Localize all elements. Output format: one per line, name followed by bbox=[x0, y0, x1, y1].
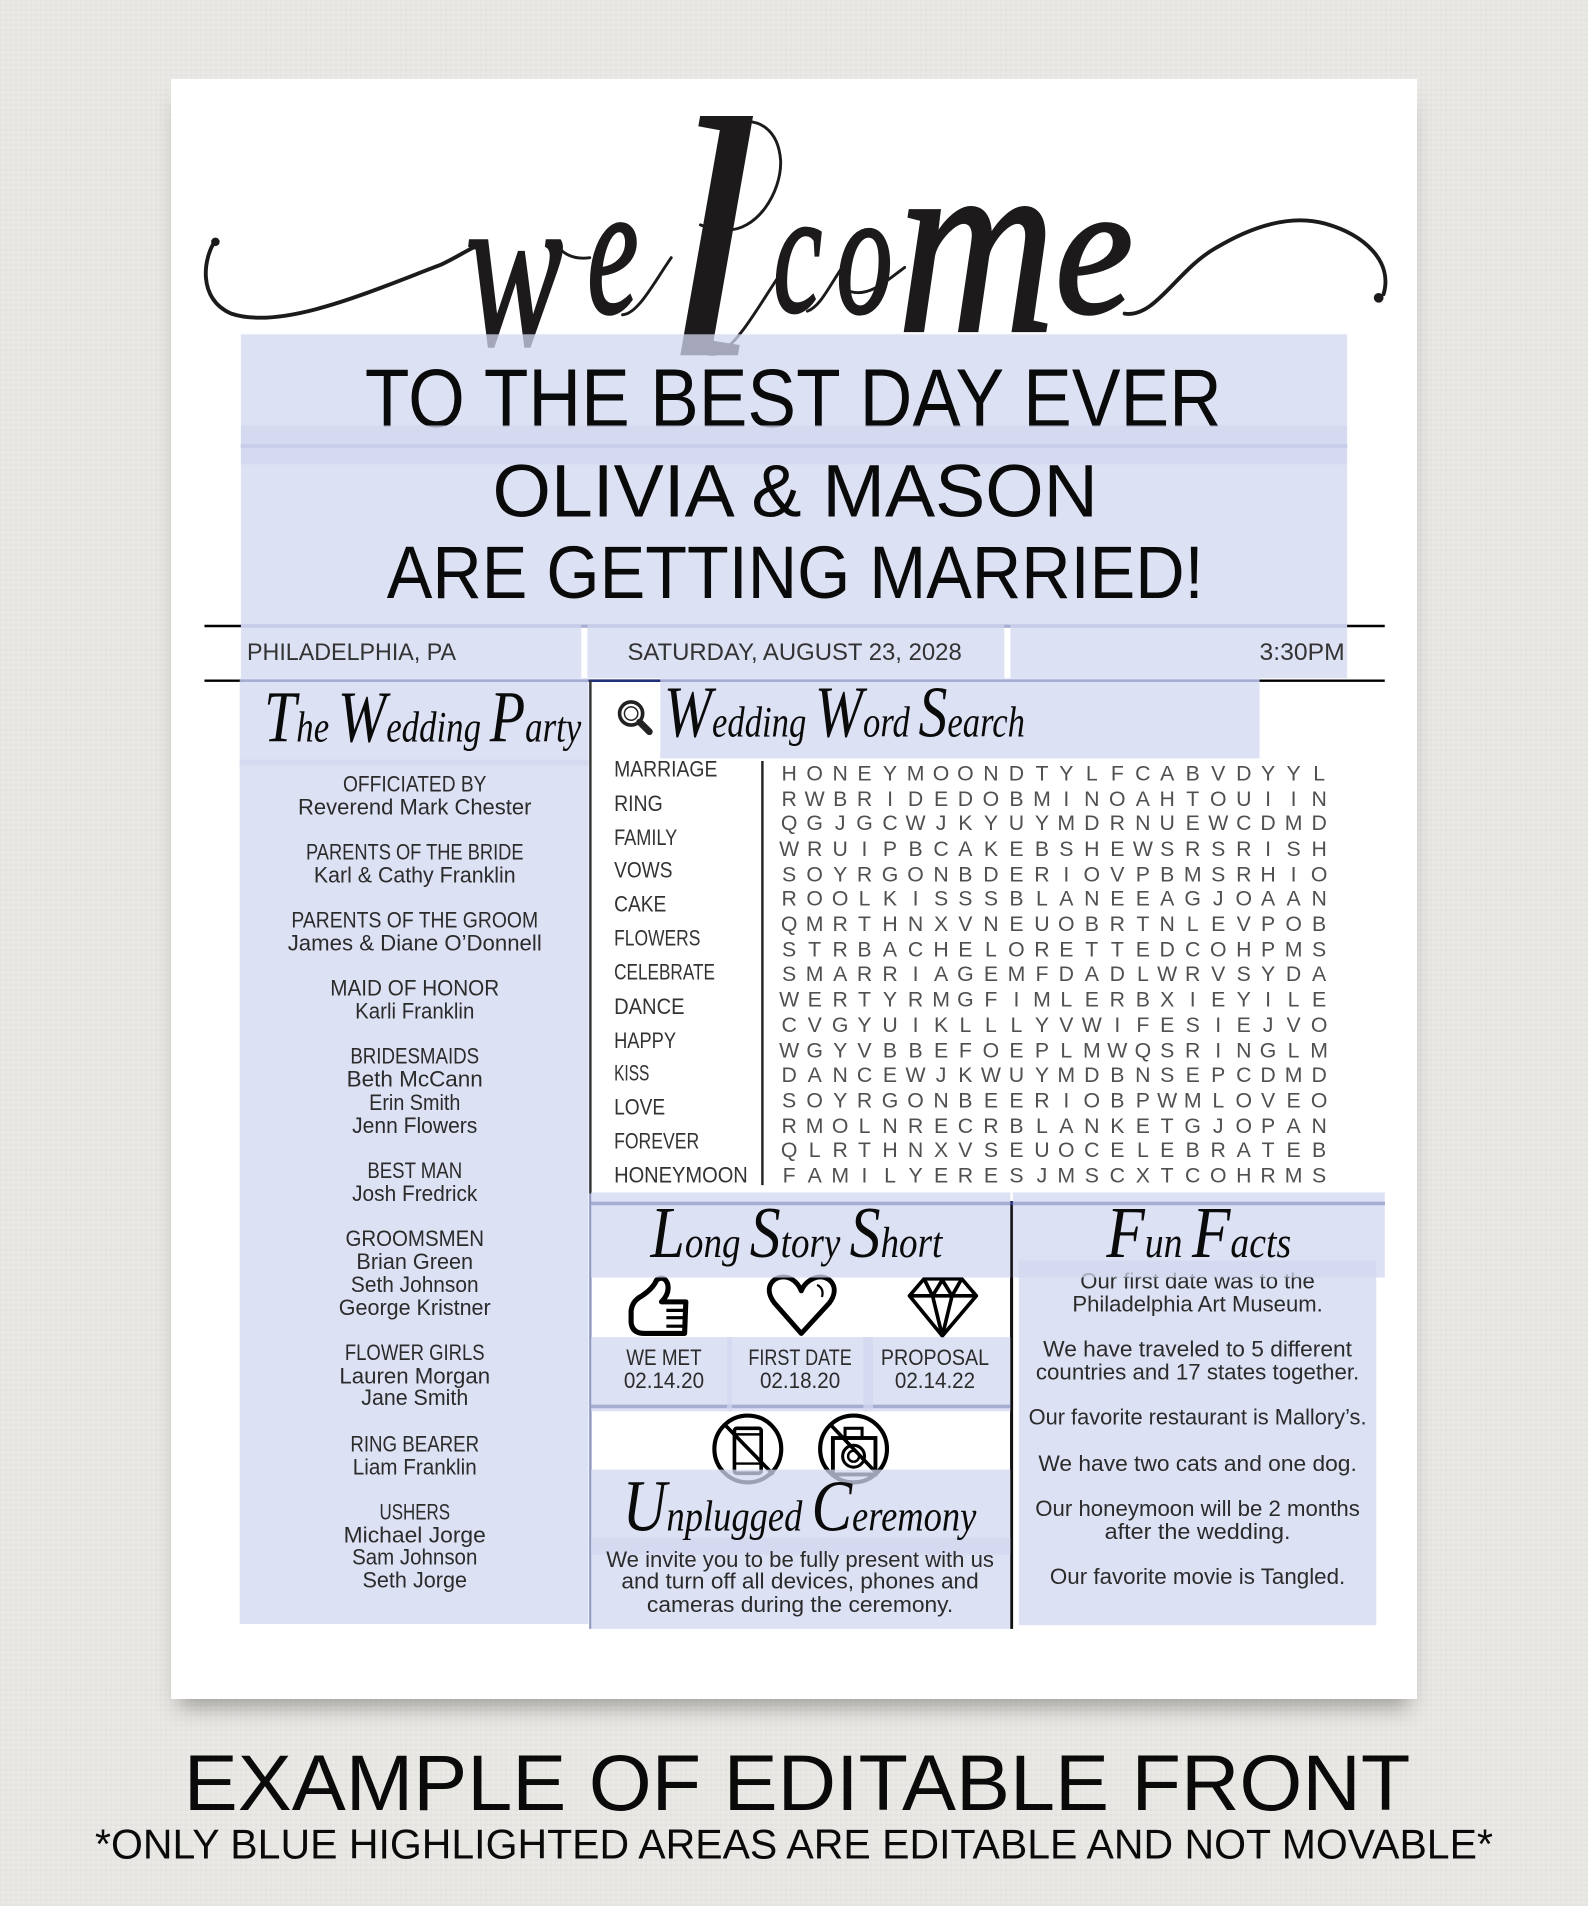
fun facts list: after the wedding. bbox=[1105, 1519, 1291, 1544]
panel: unplugged body bbox=[591, 1538, 1010, 1629]
fun facts list: Our first date was to the bbox=[1080, 1268, 1315, 1293]
wedding party list: GROOMSMEN bbox=[345, 1226, 484, 1251]
paper sheet bbox=[171, 79, 1417, 1699]
word list: VOWS bbox=[614, 858, 672, 883]
welcome script heading: l bbox=[664, 51, 759, 428]
wedding party list: FLOWER GIRLS bbox=[345, 1340, 485, 1365]
timeline: first date: 02.18.20 bbox=[760, 1368, 840, 1393]
icon: thumbs up bbox=[631, 1278, 686, 1333]
heading: wedding word search: Wedding Word Search bbox=[664, 672, 1025, 753]
fun facts list: Our favorite restaurant is Mallory’s. bbox=[1029, 1405, 1367, 1430]
welcome script heading: w bbox=[466, 144, 563, 393]
wedding party list: OFFICIATED BY bbox=[343, 771, 487, 796]
word search grid bbox=[779, 761, 1328, 1188]
unplugged message: We invite you to be fully present with us bbox=[606, 1547, 994, 1572]
wedding party list: PARENTS OF THE BRIDE bbox=[306, 839, 524, 864]
wedding party list: PARENTS OF THE GROOM bbox=[291, 907, 538, 932]
word list: HONEYMOON bbox=[614, 1163, 748, 1188]
word search grid: WRUIPBCAKEBSHEWSRSRISH bbox=[779, 837, 1327, 861]
wedding party list: Sam Johnson bbox=[352, 1544, 477, 1569]
wedding party list: Karl & Cathy Franklin bbox=[314, 862, 516, 887]
wedding party list: James & Diane O’Donnell bbox=[288, 931, 542, 956]
word search grid: DANCEWJKWUYMDBNSEPCDMD bbox=[781, 1063, 1327, 1087]
panel: wedding party body bbox=[240, 760, 589, 1624]
panel: fun facts body bbox=[1019, 1261, 1376, 1625]
date: SATURDAY, AUGUST 23, 2028 bbox=[627, 639, 962, 666]
wedding party list: Jane Smith bbox=[361, 1385, 468, 1410]
word list: CELEBRATE bbox=[614, 960, 715, 985]
wedding party list: Lauren Morgan bbox=[339, 1363, 490, 1388]
panel: long story short title highlight bbox=[591, 1192, 1010, 1278]
fun facts list bbox=[1029, 1268, 1367, 1589]
word search grid: FAMILYERESJMSCXTCOHRMS bbox=[783, 1164, 1326, 1188]
word search grid: SMARRIAGEMFDADLWRVSYDA bbox=[782, 962, 1327, 986]
tagline: TO THE BEST DAY EVER bbox=[365, 352, 1222, 445]
couple names: OLIVIA & MASON bbox=[493, 450, 1098, 533]
word search grid: HONEYMOONDTYLFCABVDYYL bbox=[781, 761, 1325, 785]
word search grid: ROOLKISSSBLANEEAGJOAAN bbox=[781, 887, 1327, 911]
panel: couple names highlight bbox=[241, 425, 1347, 627]
wedding party list: Brian Green bbox=[356, 1249, 473, 1274]
welcome script heading: e bbox=[587, 144, 638, 353]
wedding party list: Seth Johnson bbox=[351, 1272, 479, 1297]
welcome script heading: c bbox=[773, 155, 822, 350]
timeline: we met: 02.14.20 bbox=[624, 1368, 704, 1393]
wedding party list: USHERS bbox=[379, 1499, 450, 1524]
heading: long story short: Long Story Short bbox=[650, 1192, 944, 1273]
heading: unplugged ceremony: Unplugged Ceremony bbox=[623, 1465, 977, 1546]
unplugged message: cameras during the ceremony. bbox=[647, 1592, 953, 1617]
word search grid: QGJGCWJKYUYMDRNUEWCDMD bbox=[781, 811, 1327, 835]
timeline: we met: WE MET bbox=[626, 1345, 702, 1370]
wedding party list: Liam Franklin bbox=[353, 1454, 477, 1479]
panel: unplugged title highlight bbox=[591, 1470, 1010, 1555]
panel: fun facts title highlight bbox=[1013, 1192, 1385, 1278]
word search grid: WERTYRMGFIMLERBXIEYILE bbox=[779, 987, 1326, 1011]
word search grid: SOYRGONBDERIOVPBMSRHIO bbox=[782, 862, 1327, 886]
icon: no phones bbox=[714, 1416, 781, 1482]
unplugged message: and turn off all devices, phones and bbox=[621, 1569, 979, 1594]
heading: fun facts: Fun Facts bbox=[1106, 1192, 1291, 1273]
word search grid: WGYVBBEFOEPLMWQSRINGLM bbox=[779, 1039, 1328, 1063]
unplugged message bbox=[606, 1547, 994, 1617]
panel: wedding party title highlight bbox=[240, 678, 589, 766]
panel: proposal cell bbox=[863, 1337, 1010, 1411]
caption: example of editable front: EXAMPLE OF EDITABLE FRONT bbox=[184, 1738, 1410, 1827]
word list: CAKE bbox=[614, 892, 666, 917]
wedding party list: BRIDESMAIDS bbox=[350, 1044, 479, 1069]
timeline: we met bbox=[624, 1345, 704, 1393]
fun facts list: countries and 17 states together. bbox=[1036, 1360, 1359, 1385]
timeline: first date: FIRST DATE bbox=[748, 1345, 852, 1370]
word list: MARRIAGE bbox=[614, 757, 717, 782]
wedding party list bbox=[288, 771, 542, 1593]
word search grid: STRBACHELORETTEDCOHPMS bbox=[782, 938, 1326, 962]
timeline: proposal bbox=[881, 1345, 989, 1393]
panel: word search title highlight bbox=[660, 678, 1260, 759]
fun facts list: We have traveled to 5 different bbox=[1043, 1337, 1352, 1362]
wedding party list: Seth Jorge bbox=[362, 1568, 467, 1593]
word search grid: CVGYUIKLLLYVWIFESIEJVO bbox=[781, 1013, 1327, 1037]
fun facts list: Our honeymoon will be 2 months bbox=[1035, 1496, 1360, 1521]
wedding party list: Beth McCann bbox=[347, 1067, 483, 1092]
panel: time cell bbox=[1010, 625, 1347, 678]
word search grid: QLRTHNXVSEUOCELEBRATEB bbox=[781, 1138, 1326, 1162]
word list: FAMILY bbox=[614, 825, 678, 850]
icon: magnifying glass bbox=[620, 702, 649, 732]
wedding party list: Erin Smith bbox=[369, 1090, 460, 1115]
word list: KISS bbox=[614, 1061, 649, 1086]
timeline: first date bbox=[748, 1345, 852, 1393]
word list: LOVE bbox=[614, 1095, 665, 1120]
wedding party list: RING BEARER bbox=[350, 1431, 479, 1456]
wedding party list: George Kristner bbox=[339, 1295, 491, 1320]
fun facts list: Our favorite movie is Tangled. bbox=[1050, 1564, 1345, 1589]
word search grid: QMRTHNXVNEUOBRTNLEVPOB bbox=[781, 912, 1326, 936]
wedding party list: Jenn Flowers bbox=[352, 1113, 477, 1138]
icon: no cameras bbox=[820, 1416, 887, 1482]
fun facts list: We have two cats and one dog. bbox=[1038, 1451, 1357, 1476]
announcement line: ARE GETTING MARRIED! bbox=[387, 531, 1204, 614]
word search grid: RMOLNRECRBLANKETGJOPAN bbox=[781, 1114, 1327, 1138]
welcome script heading: m bbox=[897, 98, 1055, 388]
word list bbox=[614, 757, 748, 1188]
wedding party list: MAID OF HONOR bbox=[330, 976, 499, 1001]
word search grid: SOYRGONBEERIOBPWMLOVEO bbox=[782, 1088, 1327, 1112]
panel: tagline highlight bbox=[241, 334, 1347, 464]
word list: FLOWERS bbox=[614, 926, 700, 951]
wedding party list: Josh Fredrick bbox=[352, 1181, 477, 1206]
panel: we met cell bbox=[591, 1337, 732, 1411]
wedding party list: Michael Jorge bbox=[344, 1523, 486, 1548]
panel: location cell bbox=[241, 625, 581, 678]
word list: HAPPY bbox=[614, 1028, 676, 1053]
word list: FOREVER bbox=[614, 1129, 699, 1154]
time: 3:30PM bbox=[1260, 639, 1345, 666]
welcome script heading: e bbox=[1055, 144, 1133, 353]
wedding party list: Reverend Mark Chester bbox=[298, 794, 531, 819]
icon: heart bbox=[769, 1277, 834, 1333]
wedding party list: Karli Franklin bbox=[355, 999, 474, 1024]
welcome script heading: o bbox=[837, 156, 892, 351]
location: PHILADELPHIA, PA bbox=[247, 639, 457, 666]
word list: RING bbox=[614, 791, 663, 816]
icon: diamond bbox=[909, 1279, 976, 1336]
panel: first date cell bbox=[727, 1337, 873, 1411]
fun facts list: Philadelphia Art Museum. bbox=[1072, 1292, 1323, 1317]
heading: the wedding party: The Wedding Party bbox=[264, 676, 582, 757]
word list: DANCE bbox=[614, 994, 685, 1019]
panel: date cell bbox=[587, 625, 1004, 678]
caption: editable areas note: *ONLY BLUE HIGHLIGHTED AREAS ARE EDITABLE AND NOT MOVABLE* bbox=[95, 1822, 1493, 1868]
welcome script heading bbox=[206, 51, 1385, 428]
word search grid: RWBRIDEDOBMINOAHTOUIIN bbox=[781, 787, 1327, 811]
timeline: proposal: PROPOSAL bbox=[881, 1345, 989, 1370]
timeline: proposal: 02.14.22 bbox=[895, 1368, 975, 1393]
wedding party list: BEST MAN bbox=[367, 1158, 462, 1183]
